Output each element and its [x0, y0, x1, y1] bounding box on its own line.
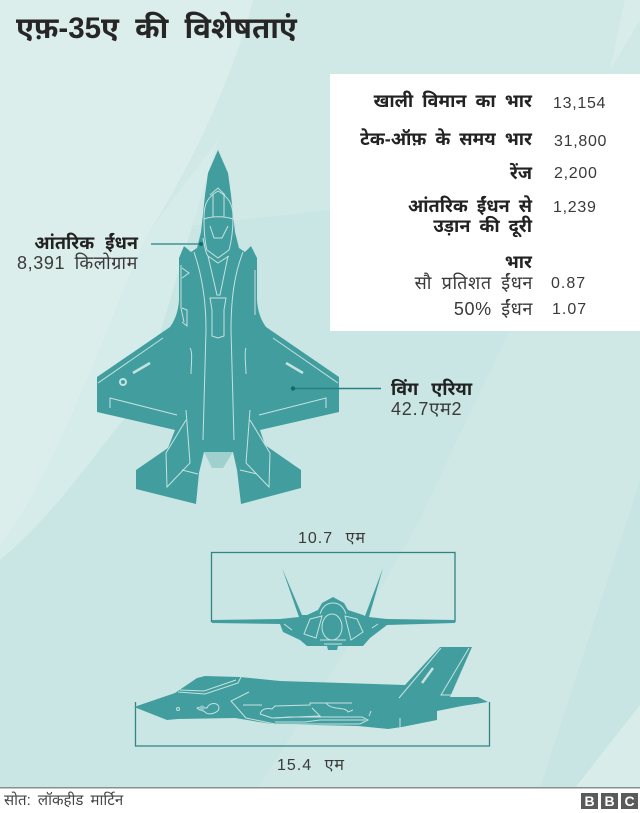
footer band	[0, 787, 640, 813]
value: internal fuel distance: 1,239	[553, 199, 597, 216]
source: सोत: लॉकहीड मार्टिन	[4, 792, 123, 809]
value: half fuel: 1.07	[552, 301, 587, 318]
BBC logo	[581, 793, 638, 809]
top view aircraft	[97, 150, 339, 504]
label: full fuel: सौ प्रतिशत ईंधन	[415, 273, 533, 293]
front view aircraft	[212, 568, 455, 650]
label: take-off weight: टेक-ऑफ़ के समय भार	[360, 129, 532, 149]
value: empty weight: 13,154	[553, 95, 606, 112]
label: empty weight: खाली विमान का भार	[374, 91, 532, 111]
callout text: internal fuel: आंतरिक ईंधन	[34, 233, 138, 253]
callout text: wing area	[391, 378, 472, 419]
callout text: internal fuel: 8,391 किलोग्राम	[17, 253, 138, 273]
callout line: internal fuel	[151, 242, 203, 246]
label: internal fuel distance	[408, 195, 532, 238]
side view aircraft	[134, 647, 488, 729]
value: full fuel: 0.87	[551, 275, 586, 292]
length label: 15.4 एम	[277, 757, 345, 774]
label: range: रेंज	[510, 163, 532, 183]
callout text: internal fuel	[17, 232, 138, 273]
value: take-off weight: 31,800	[554, 133, 607, 150]
callout text: wing area: विंग एरिया	[391, 379, 472, 399]
side view length box	[136, 702, 490, 746]
BBC logo: C	[624, 793, 635, 809]
label: internal fuel distance: आंतरिक ईंधन से	[408, 196, 532, 216]
panel: specifications	[330, 74, 640, 331]
label: internal fuel distance: उड़ान की दूरी	[433, 216, 532, 236]
BBC logo: B	[604, 793, 615, 809]
BBC logo: B	[584, 793, 595, 809]
callout text: wing area: 42.7एम2	[391, 399, 462, 419]
width label: 10.7 एम	[298, 530, 366, 547]
callout line: wing area	[291, 386, 381, 391]
label: weight heading: भार	[505, 252, 532, 272]
label: half fuel: 50% ईंधन	[454, 299, 533, 319]
title: एफ़-35ए की विशेषताएं	[16, 12, 297, 45]
value: range: 2,200	[554, 165, 598, 182]
front view width box	[212, 552, 455, 622]
